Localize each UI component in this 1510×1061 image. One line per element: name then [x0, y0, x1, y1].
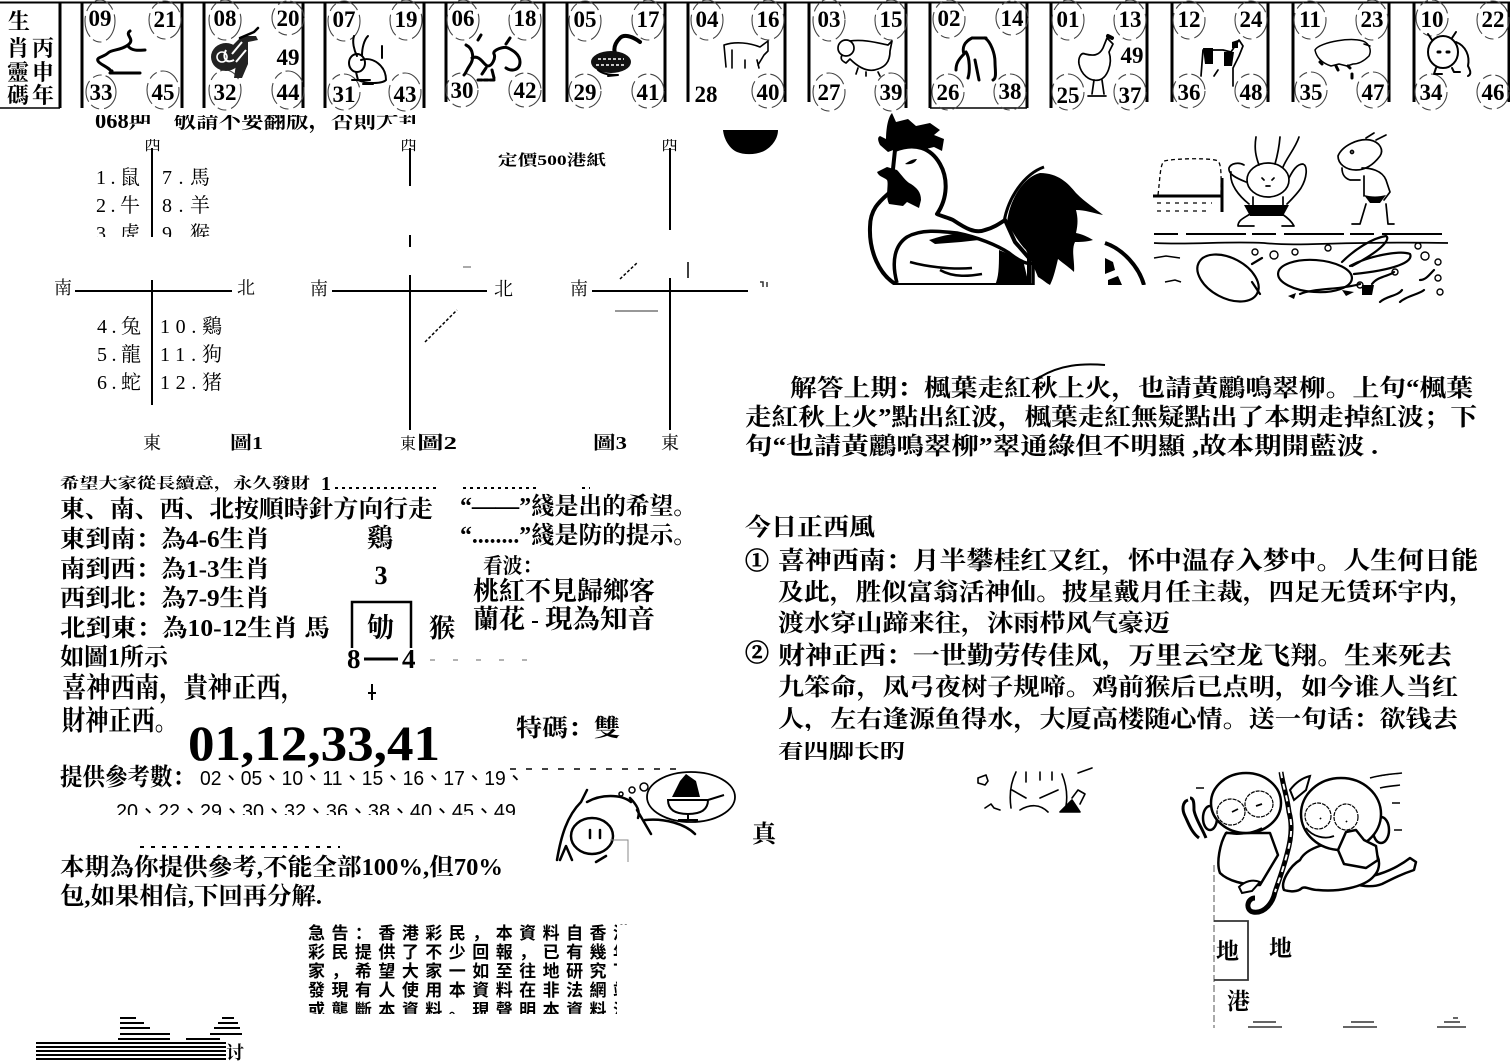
- number labels: 20: [276, 6, 300, 31]
- number labels: 35: [1300, 80, 1322, 105]
- diagram: zodiac code box: [347, 524, 530, 700]
- number labels: 45: [152, 80, 174, 105]
- icon: monkey: [956, 38, 996, 80]
- number labels: 41: [636, 80, 660, 105]
- text block: compass rule: 西到北：為7-9生肖: [60, 585, 270, 612]
- text block: disclaimer: [60, 854, 503, 910]
- notice paragraph: 彩民提供了不少回報，已有幾年: [308, 942, 630, 962]
- number labels: 07: [332, 7, 356, 32]
- number labels: 38: [998, 79, 1022, 104]
- diagram: figure 2 compass: 東: [400, 435, 416, 453]
- zodiac list: 11.狗: [160, 343, 222, 366]
- number labels: 43: [394, 82, 416, 107]
- text block: line legend: [460, 493, 697, 549]
- icon: dragon: [464, 35, 520, 80]
- number labels: 16: [756, 7, 780, 32]
- text block: reading wishes: 1: [321, 473, 331, 495]
- icon: horse sketch: [98, 31, 145, 73]
- number labels: 06: [452, 6, 474, 31]
- notice paragraph: [300, 923, 640, 1022]
- title box: zodiac numbers of the year: 丙: [32, 36, 54, 61]
- notice paragraph: 發現有人使用本資料在非法網站: [308, 981, 630, 1000]
- zodiac list: 1.鼠: [96, 166, 140, 189]
- number labels: 42: [514, 78, 536, 103]
- number labels: 27: [818, 80, 840, 105]
- diagram: zodiac code box: 猴: [429, 614, 455, 643]
- title box: zodiac numbers of the year: 靈: [7, 60, 29, 85]
- text block: reading wishes: [60, 473, 590, 495]
- zodiac list: 10.鷄: [160, 315, 222, 338]
- text block: reading wishes: 希望大家從長續意，永久發財: [60, 474, 310, 493]
- text block: compass rule: [60, 495, 433, 671]
- icon: pig: [1315, 40, 1370, 78]
- number labels: 13: [1118, 7, 1142, 32]
- text block: today's wind and gods poems: [745, 514, 1478, 769]
- reference numbers: [60, 764, 680, 847]
- beak and wattle: [877, 167, 921, 208]
- number labels: 32: [214, 80, 236, 105]
- text block: today's wind and gods poems: ②: [745, 640, 769, 667]
- icon: rabbit: [349, 36, 386, 84]
- text block: last issue answer: [745, 364, 1478, 460]
- number labels: 02: [938, 6, 960, 31]
- number labels: 44: [276, 80, 300, 105]
- text block: today's wind and gods poems: 财神正西：一世勤劳传佳风，万里云空龙飞翔。生来死去: [778, 642, 1453, 671]
- text block: today's wind and gods poems: 九笨命，凤弓夜树子规啼。鸡前猴后已点明，如今谁人当红: [778, 673, 1458, 701]
- clipped top notice text: 068期，敬請不要翻版，否則大卦: [95, 108, 423, 134]
- number labels: 21: [154, 7, 176, 32]
- text block: today's wind and gods poems: 喜神西南：月半攀桂红又红，怀中温存入梦中。人生何日能: [778, 547, 1478, 576]
- text block: last issue answer: 解答上期：楓葉走紅秋上火，也請黃鸝鳴翠柳。上句“楓葉: [790, 375, 1473, 402]
- diagram: zodiac code box: 鷄: [367, 524, 393, 553]
- text block: today's wind and gods poems: 渡水穿山蹄来往，沐雨栉风气豪迈: [778, 610, 1170, 637]
- number labels: 31: [332, 82, 356, 107]
- text block: gods: 財神正西。: [62, 705, 178, 737]
- vertical dashed rule: [1213, 865, 1215, 1028]
- reference numbers: 02、05、10、11、15、16、17、19、: [200, 768, 525, 790]
- text block: disclaimer: 本期為你提供參考,不能全部100%,但70%: [60, 854, 503, 881]
- icon: goat/ox: [724, 41, 768, 68]
- big numbers: 01,12,33,41: [188, 715, 440, 771]
- number labels: 23: [1360, 7, 1384, 32]
- title box: zodiac numbers of the year: 年: [32, 83, 54, 108]
- number labels: 04: [696, 7, 719, 32]
- zodiac list: 2.牛: [96, 194, 140, 217]
- icon: tiger: [211, 28, 258, 78]
- diagram: figure 2 compass: 南: [310, 278, 328, 299]
- zodiac list: 7.馬: [162, 166, 210, 189]
- diagram: zodiac code box: 劬: [367, 613, 394, 643]
- number labels: 11: [1299, 7, 1321, 32]
- diagram: figure 1 compass: 東: [143, 433, 161, 453]
- number circles: [85, 0, 1509, 111]
- text block: today's wind and gods poems: 人，左右逢源鱼得水，大厦高楼随心情。送一句话：欲钱去: [778, 705, 1459, 733]
- illustration: angry face fragment: [978, 768, 1092, 812]
- number labels: 46: [1482, 80, 1504, 105]
- text block: line legend: “........”綫是防的提示。: [460, 522, 697, 549]
- title box: zodiac numbers of the year: 申: [32, 60, 54, 85]
- zodiac list: 5.龍: [97, 343, 141, 366]
- number labels: 15: [880, 7, 902, 32]
- short rules bottom right: [1248, 1018, 1466, 1027]
- number labels: 09: [88, 6, 112, 31]
- text block: compass rule: 東到南：為4-6生肖: [60, 525, 270, 553]
- number labels: 49: [276, 45, 300, 70]
- zodiac list: 9.猴: [162, 222, 210, 245]
- text block: compass rule: 東、南、西、北按順時針方向行走: [60, 495, 433, 523]
- number labels: 39: [880, 80, 902, 105]
- diagram: zodiac code box: 4: [402, 644, 416, 674]
- number labels: 17: [636, 7, 660, 32]
- diagram: figure 1 compass: 北: [237, 278, 255, 298]
- diagram: zodiac code box: 8: [347, 644, 360, 674]
- number labels: 48: [1240, 80, 1262, 105]
- diagram: figure 3 compass: [570, 124, 767, 453]
- notice paragraph: 或壟斷本資料。現聲明本資料注: [308, 1000, 630, 1020]
- diagram: figure 2 compass: 西: [400, 135, 417, 154]
- diagram: zodiac code box: 3: [374, 561, 388, 590]
- icon: rat: [1428, 32, 1470, 76]
- stray character: 真: [752, 821, 779, 848]
- decorative plate: [1105, 243, 1144, 285]
- diagram: figure 3 compass: 西: [661, 135, 678, 154]
- text block: gods: 喜神西南，貴神正西，: [62, 672, 305, 704]
- number labels: 12: [1178, 7, 1200, 32]
- number labels: 49: [1120, 43, 1144, 68]
- special code: 特碼：雙: [516, 715, 620, 742]
- icon: rooster: [1079, 36, 1113, 96]
- text block: compass rule: 北到東：為10-12生肖 馬: [60, 615, 330, 642]
- box with characters: 地: [1216, 939, 1239, 964]
- pool edge: [1154, 233, 1448, 235]
- number labels: 29: [574, 80, 596, 105]
- title box: zodiac numbers of the year: 生: [8, 9, 30, 34]
- text block: last issue answer: 句“也請黃鸝鳴翠柳”翠通綠但不明顯 ,故本期開藍波 .: [745, 433, 1378, 460]
- diagram: figure 1 compass: 圖1: [230, 433, 263, 453]
- box with characters: [1214, 921, 1292, 1014]
- box with characters: 地: [1269, 936, 1292, 961]
- diagram: figure 3 compass: 圖3: [593, 433, 627, 453]
- cell borders: [82, 3, 1509, 108]
- text block: today's wind and gods poems: ①: [745, 548, 769, 575]
- text block: compass rule: 如圖1所示: [60, 644, 170, 671]
- header: zodiac number strip: [0, 0, 1510, 111]
- box with characters: 港: [1227, 989, 1250, 1014]
- stray character: [752, 821, 786, 848]
- number labels: 08: [214, 6, 236, 31]
- zodiac list: 12.猪: [160, 371, 222, 394]
- cub standing: [1338, 133, 1394, 224]
- icon: black blob: [723, 130, 778, 154]
- wing: [894, 231, 1033, 285]
- diagram: figure 2 compass: [310, 124, 513, 453]
- illustration: rabbit and cub cartoon: [1153, 133, 1448, 311]
- reference numbers: 提供參考數：: [60, 764, 195, 791]
- heading: price: 定價500港紙: [498, 151, 606, 169]
- illustration: rooster: [860, 113, 1160, 295]
- reference numbers: 20、22、29、30、32、36、38、40、45、49: [116, 801, 516, 823]
- illustration: pig dreaming of dessert: [557, 772, 735, 862]
- number labels: 30: [450, 78, 474, 103]
- text block: wave hint: 現為知音: [545, 605, 655, 634]
- text block: wave hint: [473, 554, 655, 634]
- diagram: figure 1 compass: 南: [54, 277, 72, 298]
- text block: wave hint: 蘭花: [473, 605, 525, 634]
- zodiac list: 3.虎: [96, 222, 140, 245]
- number labels: 47: [1362, 80, 1384, 105]
- text block: wave hint: 桃紅不見歸鄉客: [473, 576, 655, 606]
- notice paragraph: 家，希望大家一如至往地研究下: [308, 961, 630, 981]
- rabbit flexing: [1229, 137, 1306, 226]
- diagram: figure 1 compass: [54, 124, 263, 453]
- rabbits in water: [1189, 236, 1434, 311]
- text block: today's wind and gods poems: 今日正西風: [745, 514, 875, 541]
- zodiac list: 8.羊: [162, 194, 210, 217]
- text block: last issue answer: 走紅秋上火”點出紅波，楓葉走紅無疑點出了本期走掉紅波；下: [745, 404, 1478, 431]
- icon: snake: [591, 36, 640, 76]
- title box: zodiac numbers of the year: 碼: [7, 83, 29, 108]
- number labels: 01: [1056, 7, 1080, 32]
- clipped top notice text: [85, 100, 430, 136]
- body: [870, 146, 1029, 285]
- diagram: figure 2 compass: 圖2: [417, 433, 457, 453]
- notice paragraph: 急告：香港彩民，本資料自香港: [308, 923, 630, 943]
- number labels: 10: [1420, 7, 1444, 32]
- tail: [1007, 173, 1103, 285]
- title box: zodiac numbers of the year: [0, 2, 60, 108]
- text block: today's wind and gods poems: 看四脚长的: [778, 737, 905, 764]
- number labels: 22: [1482, 7, 1504, 32]
- number labels: 33: [90, 80, 112, 105]
- number labels: 40: [756, 80, 780, 105]
- diagram: figure 3 compass: 東: [661, 433, 679, 453]
- zodiac list: [96, 166, 222, 394]
- illustration: two monkeys on vine: [1183, 772, 1416, 912]
- number labels: 37: [1118, 83, 1142, 108]
- number labels: 36: [1178, 80, 1200, 105]
- icon: dog: [1201, 40, 1243, 86]
- number labels: 18: [514, 6, 536, 31]
- number labels: 34: [1420, 80, 1443, 105]
- icon: ram: [838, 40, 892, 76]
- diagram: figure 3 compass: 南: [570, 278, 588, 299]
- text block: disclaimer: 包,如果相信,下回再分解.: [60, 883, 322, 910]
- number labels: 14: [1000, 6, 1024, 31]
- title box: zodiac numbers of the year: 肖: [7, 36, 29, 61]
- number labels: 28: [694, 82, 718, 107]
- number labels: 03: [818, 7, 840, 32]
- text block: wave hint: 看波：: [483, 554, 542, 578]
- diagram: figure 1 compass: 西: [144, 135, 161, 154]
- text block: line legend: “——”綫是出的希望。: [460, 493, 697, 520]
- number labels: 26: [936, 80, 960, 105]
- number labels: 05: [574, 7, 596, 32]
- comb: [878, 113, 944, 152]
- diagram: figure 2 compass: 北: [494, 278, 513, 300]
- striped bars bottom left: [36, 1018, 242, 1059]
- number labels: 19: [394, 7, 418, 32]
- text block: today's wind and gods poems: 及此，胜似富翁活神仙。披星戴月任主裁，四足无赁环宇内，: [778, 578, 1475, 606]
- zodiac list: 6.蛇: [97, 371, 141, 394]
- number labels: 25: [1056, 83, 1080, 108]
- number labels: 24: [1240, 7, 1263, 32]
- number labels: [88, 6, 1504, 108]
- text block: compass rule: 南到西：為1-3生肖: [60, 555, 270, 583]
- text block: gods: [62, 672, 305, 737]
- zodiac list: 4.兔: [97, 315, 141, 338]
